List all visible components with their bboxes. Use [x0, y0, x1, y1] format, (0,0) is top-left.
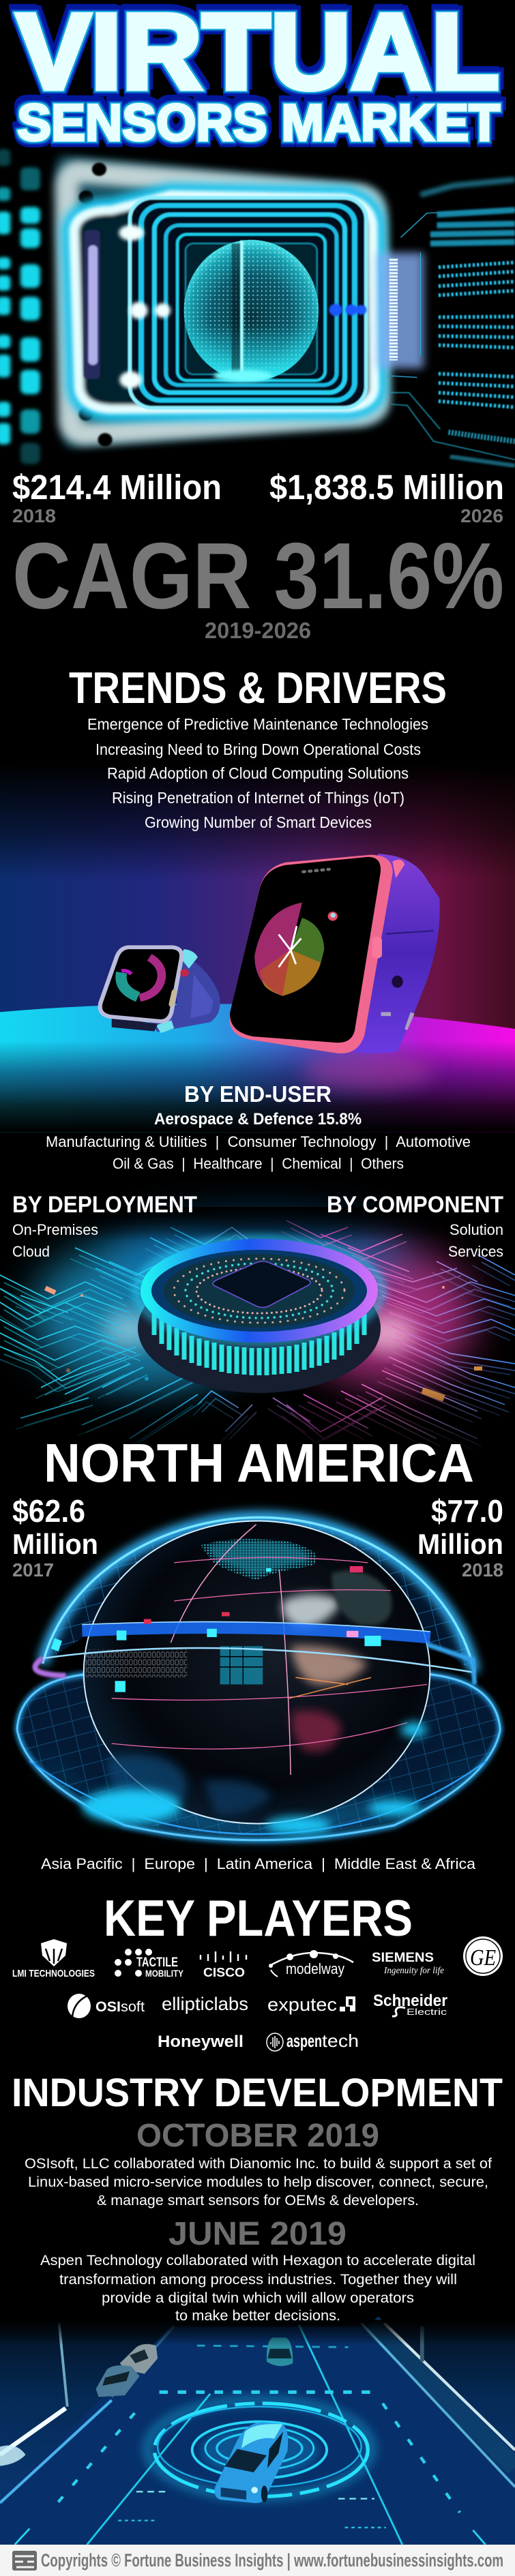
june 2019 description: Aspen Technology collaborated with Hexagon to accelerate digital — [40, 2253, 475, 2268]
globe illustration — [17, 1518, 500, 1840]
logo: modelway: modelway — [286, 1960, 344, 1977]
strap — [342, 854, 440, 1053]
hero illustration: glowing sensor core — [0, 149, 515, 466]
glowing table — [0, 1004, 515, 1133]
activity rings — [140, 957, 162, 998]
side slot — [84, 230, 100, 379]
lane dashes — [15, 2346, 486, 2545]
street lamp glow — [0, 2445, 26, 2466]
heading: INDUSTRY DEVELOPMENT — [12, 2071, 503, 2115]
logo: aspentech: aspen — [286, 2031, 322, 2051]
logo: Honeywell: Honeywell — [158, 2033, 244, 2051]
other regions: Asia Pacific | Europe | Latin America | Middle East & Africa — [41, 1855, 476, 1872]
logo: modelway — [269, 1950, 353, 1977]
logo: Schneider Electric: Schneider — [373, 1992, 447, 2010]
processor teeth — [154, 1308, 364, 1375]
segment list line 2: Oil & Gas | Healthcare | Chemical | Others — [113, 1155, 404, 1172]
june 2019 description: to make better decisions. — [175, 2308, 340, 2324]
logo: Schneider Electric — [373, 1992, 447, 2017]
2018 value: Million — [417, 1528, 503, 1560]
trends and drivers — [69, 663, 447, 831]
logo: Siemens: SIEMENS — [372, 1951, 434, 1965]
processor top plate — [136, 1239, 382, 1343]
road illustration: autonomous car — [0, 2320, 515, 2545]
white lights — [119, 225, 171, 389]
central sphere — [184, 240, 319, 382]
heading: BY COMPONENT — [327, 1192, 503, 1218]
heading: TRENDS & DRIVERS — [69, 663, 447, 713]
logo: Tactile Mobility: TACTILE — [136, 1956, 178, 1970]
2018 value: $77.0 — [431, 1493, 503, 1529]
watch scene background — [0, 764, 515, 1091]
left glowing indicator columns — [0, 149, 40, 464]
october 2019 description: Linux-based micro-service modules to help discover, connect, secure, — [28, 2174, 488, 2190]
main car — [215, 2422, 288, 2503]
logo: Siemens: Ingenuity for life — [383, 1966, 444, 1976]
leading segment: Aerospace & Defence 15.8% — [154, 1110, 362, 1128]
2017 value: 2017 — [12, 1559, 54, 1581]
logo: GE: GE — [470, 1945, 496, 1971]
october 2019 date: OCTOBER 2019 — [136, 2118, 379, 2154]
processor chip — [213, 1261, 310, 1308]
driver list: Growing Number of Smart Devices — [145, 813, 372, 831]
road surface — [0, 2320, 515, 2545]
smartwatch illustration — [0, 854, 515, 1133]
large watch — [229, 854, 440, 1053]
market size figures — [12, 468, 504, 643]
heading: BY DEPLOYMENT — [12, 1192, 197, 1218]
logo: Siemens — [372, 1951, 444, 1976]
driver list: Rising Penetration of Internet of Things (IoT) — [112, 789, 404, 807]
logo: exputec: exputec — [267, 1994, 337, 2015]
by component segment — [327, 1192, 503, 1260]
2018 value — [417, 1493, 503, 1581]
2017 value: Million — [12, 1528, 98, 1560]
october 2019 description: & manage smart sensors for OEMs & developers. — [97, 2193, 419, 2208]
roadside strips — [0, 2323, 515, 2545]
upper dome — [43, 1518, 475, 1673]
circuit pads — [44, 1286, 482, 1402]
concentric rings — [130, 198, 366, 408]
vertical fades — [0, 1391, 515, 1459]
logo: Cisco — [201, 1951, 246, 1979]
heading: NORTH AMERICA — [44, 1433, 474, 1493]
processor base — [138, 1263, 381, 1393]
sensor rings — [148, 2400, 371, 2496]
continents — [85, 1539, 392, 1815]
driver list — [87, 715, 428, 831]
footer — [0, 2545, 515, 2576]
globe grid lines — [112, 1525, 427, 1775]
october 2019 description: OSIsoft, LLC collaborated with Dianomic Inc. to build & support a set of — [25, 2156, 492, 2172]
circuit traces — [0, 1220, 515, 1450]
blue lights — [329, 304, 366, 316]
circuit board with processor illustration — [0, 1207, 515, 1459]
october 2019 description — [25, 2156, 492, 2208]
distant cars — [96, 2337, 293, 2397]
small watch — [100, 947, 220, 1033]
logo: Cisco: CISCO — [203, 1966, 245, 1979]
logo: GE — [463, 1936, 503, 1976]
june 2019 description: transformation among process industries. Together they will — [59, 2272, 457, 2288]
value 2018: $214.4 Million — [12, 468, 222, 507]
processor component dots — [174, 1259, 344, 1323]
side glows — [31, 1217, 474, 1391]
by deployment segment — [12, 1192, 197, 1260]
data readout rows — [391, 179, 515, 466]
segment list line 1: Manufacturing & Utilities | Consumer Technology | Automotive — [46, 1133, 471, 1150]
2017 value — [12, 1493, 98, 1581]
driver list: Rapid Adoption of Cloud Computing Solutions — [107, 764, 409, 782]
orbital band — [35, 1622, 475, 1684]
year 2018: 2018 — [12, 505, 56, 526]
driver list: Increasing Need to Bring Down Operational Costs — [95, 740, 421, 758]
logo: aspentech: tech — [322, 2031, 359, 2051]
case — [229, 855, 393, 1053]
2018 value: 2018 — [462, 1559, 503, 1581]
solution: Solution — [450, 1221, 503, 1238]
top fade — [0, 2320, 515, 2346]
on-premises: On-Premises — [12, 1221, 98, 1238]
june 2019 date: JUNE 2019 — [168, 2216, 347, 2252]
title line 2: SENSORS MARKET — [17, 94, 500, 152]
year 2026: 2026 — [460, 505, 503, 526]
by end-user segment — [46, 1081, 471, 1172]
june 2019 description: provide a digital twin which will allow operators — [102, 2290, 414, 2306]
lower dish — [17, 1673, 500, 1840]
speaker dots — [303, 869, 329, 872]
2017 value: $62.6 — [12, 1493, 85, 1529]
industry development — [12, 2071, 503, 2324]
logo: LMI Technologies: LMI TECHNOLOGIES — [12, 1968, 95, 1979]
lower light glows — [82, 1723, 427, 1833]
logo: Schneider Electric: Electric — [407, 2007, 447, 2017]
cloud: Cloud — [12, 1243, 50, 1260]
logo: OSIsoft: soft — [121, 1999, 145, 2015]
june 2019 description — [40, 2253, 475, 2324]
bright nodes — [51, 1566, 381, 1692]
clock face — [254, 903, 324, 996]
outer frame housing — [56, 155, 387, 448]
logo: elliptic labs: ellipticlabs — [162, 1994, 248, 2014]
globe sphere — [84, 1521, 430, 1823]
heading: BY END-USER — [184, 1081, 332, 1107]
icon: Fortune Business Insights logo — [12, 2551, 37, 2571]
logo: aspentech — [267, 2031, 359, 2051]
connector strip — [378, 210, 515, 378]
logo: Tactile Mobility — [115, 1949, 184, 1979]
logo: LMI Technologies — [12, 1939, 95, 1979]
north america section text — [12, 1433, 503, 1872]
logo: Tactile Mobility: MOBILITY — [145, 1968, 184, 1979]
logo: OSIsoft: OSI — [95, 1999, 121, 2015]
key players — [12, 1889, 503, 2051]
title: Virtual Sensors Market — [16, 0, 500, 152]
glowing white frame — [74, 195, 374, 409]
logo: OSIsoft — [68, 1994, 145, 2018]
services: Services — [448, 1243, 503, 1260]
heading: KEY PLAYERS — [104, 1889, 413, 1947]
driver list: Emergence of Predictive Maintenance Technologies — [87, 715, 428, 733]
screen — [230, 857, 381, 1043]
CAGR period: 2019-2026 — [205, 618, 311, 643]
